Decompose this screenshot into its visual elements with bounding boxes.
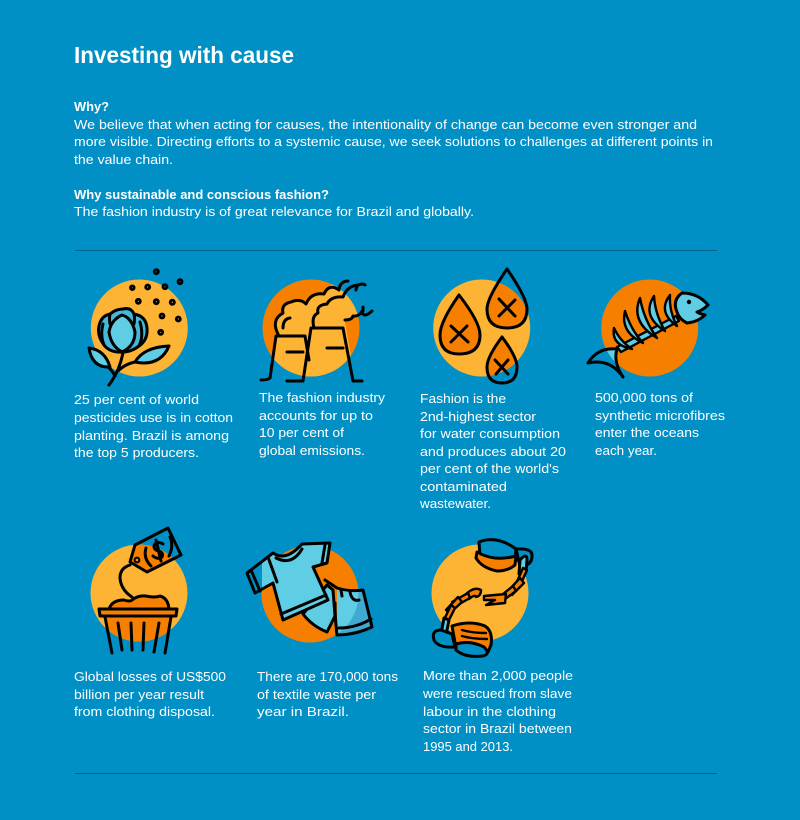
text block: why: more visible. Directing efforts to a systemic cause, we seek solutions to challenges at different points in <box>74 134 713 149</box>
text block: why: the value chain. <box>74 152 173 167</box>
text: microfibres statistic: synthetic microfibres <box>595 408 725 423</box>
text: cotton statistic: pesticides use is in cotton <box>74 410 233 425</box>
text: cotton statistic <box>74 392 233 460</box>
text: emissions statistic: accounts for up to <box>259 408 373 423</box>
text: slave labour statistic: labour in the clothing <box>423 704 556 719</box>
text: emissions statistic: global emissions. <box>259 443 365 458</box>
text: water statistic: and produces about 20 <box>420 444 566 459</box>
text: emissions statistic <box>259 390 385 458</box>
text: textile waste statistic: year in Brazil. <box>257 704 349 719</box>
text block: why sustainable fashion: The fashion industry is of great relevance for Brazil and globally. <box>74 204 474 219</box>
text: microfibres statistic: each year. <box>595 443 657 458</box>
icon: discarded clothes <box>247 543 372 642</box>
text: water statistic: wastewater. <box>419 496 491 511</box>
text: emissions statistic: The fashion industry <box>259 390 385 405</box>
icon: broken chains and cuffs <box>432 540 532 656</box>
text: water statistic: 2nd-highest sector <box>420 409 537 424</box>
text: water statistic <box>419 391 566 511</box>
text: clothing disposal statistic: billion per year result <box>74 687 204 702</box>
text: slave labour statistic <box>422 668 573 754</box>
text: clothing disposal statistic: Global losses of US$500 <box>74 669 226 684</box>
text: clothing disposal statistic <box>74 669 226 719</box>
text: water statistic: contaminated <box>420 479 507 494</box>
text: cotton statistic: the top 5 producers. <box>74 445 199 460</box>
text: microfibres statistic: enter the oceans <box>595 425 699 440</box>
title: Investing with cause <box>74 42 294 68</box>
icon: factory cooling towers <box>261 280 372 385</box>
text block: why sustainable fashion: Why sustainable and conscious fashion? <box>74 187 329 202</box>
text: textile waste statistic: of textile waste per <box>257 687 377 702</box>
icon: contaminated water drops <box>433 269 530 383</box>
text: textile waste statistic <box>257 669 398 719</box>
text: slave labour statistic: sector in Brazil between <box>423 721 572 736</box>
text: slave labour statistic: were rescued from slave <box>422 686 572 701</box>
text: textile waste statistic: There are 170,000 tons <box>257 669 398 684</box>
icon: fish skeleton <box>588 280 708 377</box>
text: cotton statistic: 25 per cent of world <box>74 392 199 407</box>
text block: why: We believe that when acting for causes, the intentionality of change can become even stronger and <box>74 117 697 132</box>
text: clothing disposal statistic: from clothing disposal. <box>74 704 215 719</box>
icon: laundry basket with price tag <box>90 528 188 653</box>
text: water statistic: for water consumption <box>420 426 560 441</box>
text block: why: Why? <box>74 99 109 114</box>
text: emissions statistic: 10 per cent of <box>259 425 344 440</box>
text block: why <box>74 99 713 167</box>
text: water statistic: Fashion is the <box>420 391 506 406</box>
text block: why sustainable fashion <box>74 187 474 219</box>
text: cotton statistic: planting. Brazil is among <box>74 428 229 443</box>
text: slave labour statistic: 1995 and 2013. <box>423 739 513 754</box>
text: microfibres statistic <box>595 390 725 458</box>
icon: cotton plant <box>89 270 188 385</box>
text: slave labour statistic: More than 2,000 people <box>423 668 573 683</box>
text: microfibres statistic: 500,000 tons of <box>595 390 693 405</box>
text: water statistic: per cent of the world's <box>420 461 559 476</box>
